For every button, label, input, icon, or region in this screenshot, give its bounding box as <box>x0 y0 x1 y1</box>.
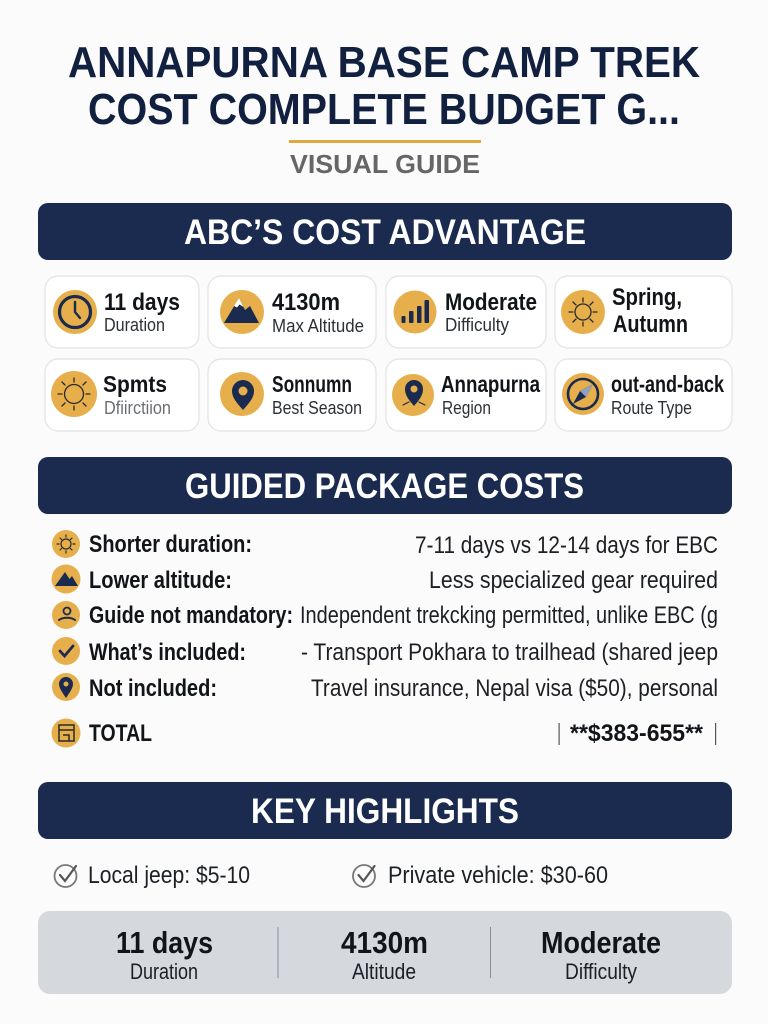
stat card: region: Annapurna <box>441 371 540 397</box>
row: total: TOTAL <box>89 720 152 747</box>
stat card: spring, autumn: Spring, <box>612 284 682 311</box>
stat card: difficulty: Moderate <box>445 289 537 316</box>
stat card: spring, autumn <box>555 276 732 348</box>
row: not included: Travel insurance, Nepal visa ($50), personal <box>311 675 718 702</box>
heading banner: cost advantage <box>38 203 732 260</box>
row: not included <box>52 673 718 702</box>
panel: key highlights <box>38 782 732 994</box>
stat card: best season <box>208 359 376 431</box>
highlight: local jeep: Local jeep: $5-10 <box>88 862 250 889</box>
row: what's included <box>52 637 718 666</box>
stat card: max altitude: Max Altitude <box>272 316 364 336</box>
stat card: difficulty: Difficulty <box>445 315 509 335</box>
row: what's included: - Transport Pokhara to trailhead (shared jeep <box>301 639 718 666</box>
stat card: garbled sun card: Dfiirctiion <box>104 398 171 418</box>
row: shorter duration: Shorter duration: <box>89 531 252 558</box>
row: not included: Not included: <box>89 675 217 702</box>
row: lower altitude: Lower altitude: <box>89 567 232 594</box>
summary: difficulty: Moderate <box>541 925 661 960</box>
stat card: max altitude: 4130m <box>272 289 340 316</box>
summary bar <box>38 911 732 994</box>
row: total: **$383-655** <box>570 720 704 747</box>
row: total <box>52 718 716 748</box>
stat card: spring, autumn: Autumn <box>613 311 688 338</box>
summary: altitude <box>341 925 428 984</box>
summary: altitude: Altitude <box>352 959 416 984</box>
stat card: duration: 11 days <box>104 289 180 316</box>
stat card: garbled sun card <box>45 359 199 431</box>
highlight: private vehicle: Private vehicle: $30-60 <box>388 862 608 889</box>
heading banner: key highlights: KEY HIGHLIGHTS <box>251 792 519 831</box>
stat card: route type: out-and-back <box>611 371 724 397</box>
row: lower altitude: Less specialized gear required <box>429 567 718 594</box>
panel: guided package costs <box>38 457 732 748</box>
panel: ABC's cost advantage <box>38 203 732 431</box>
title: ANNAPURNA BASE CAMP TREK <box>68 38 700 87</box>
row: guide not mandatory <box>52 601 718 629</box>
stat card: best season: Best Season <box>272 398 362 418</box>
summary: altitude: 4130m <box>341 925 428 960</box>
stat card: region <box>386 359 546 431</box>
stat card: difficulty <box>386 276 546 348</box>
stat card: duration <box>45 276 199 348</box>
title <box>68 38 700 134</box>
summary: difficulty: Difficulty <box>565 959 637 984</box>
summary: duration: 11 days <box>116 925 213 960</box>
stat card: garbled sun card: Spmts <box>103 371 167 397</box>
row: shorter duration <box>52 530 718 559</box>
stat card: duration: Duration <box>104 315 165 335</box>
row: lower altitude <box>52 564 718 594</box>
stat card: best season: Sonnumn <box>272 371 352 397</box>
row: shorter duration: 7-11 days vs 12-14 days for EBC <box>415 532 718 559</box>
stat card: route type <box>555 359 732 431</box>
row: what's included: What’s included: <box>89 639 246 666</box>
title: COST COMPLETE BUDGET G... <box>88 85 680 134</box>
heading banner: key highlights <box>38 782 732 839</box>
row: guide not mandatory: Guide not mandatory: <box>89 602 293 629</box>
subtitle: VISUAL GUIDE <box>290 149 480 179</box>
stat card: route type: Route Type <box>611 398 692 418</box>
title accent rule <box>289 140 481 143</box>
stat card: region: Region <box>442 398 491 418</box>
stat card: max altitude <box>208 276 376 348</box>
summary: difficulty <box>541 925 661 984</box>
heading banner: cost advantage: ABC’S COST ADVANTAGE <box>184 213 586 252</box>
summary: duration <box>116 925 213 984</box>
heading banner: guided package costs <box>38 457 732 514</box>
heading banner: guided package costs: GUIDED PACKAGE COSTS <box>185 467 584 506</box>
summary: duration: Duration <box>130 959 198 984</box>
